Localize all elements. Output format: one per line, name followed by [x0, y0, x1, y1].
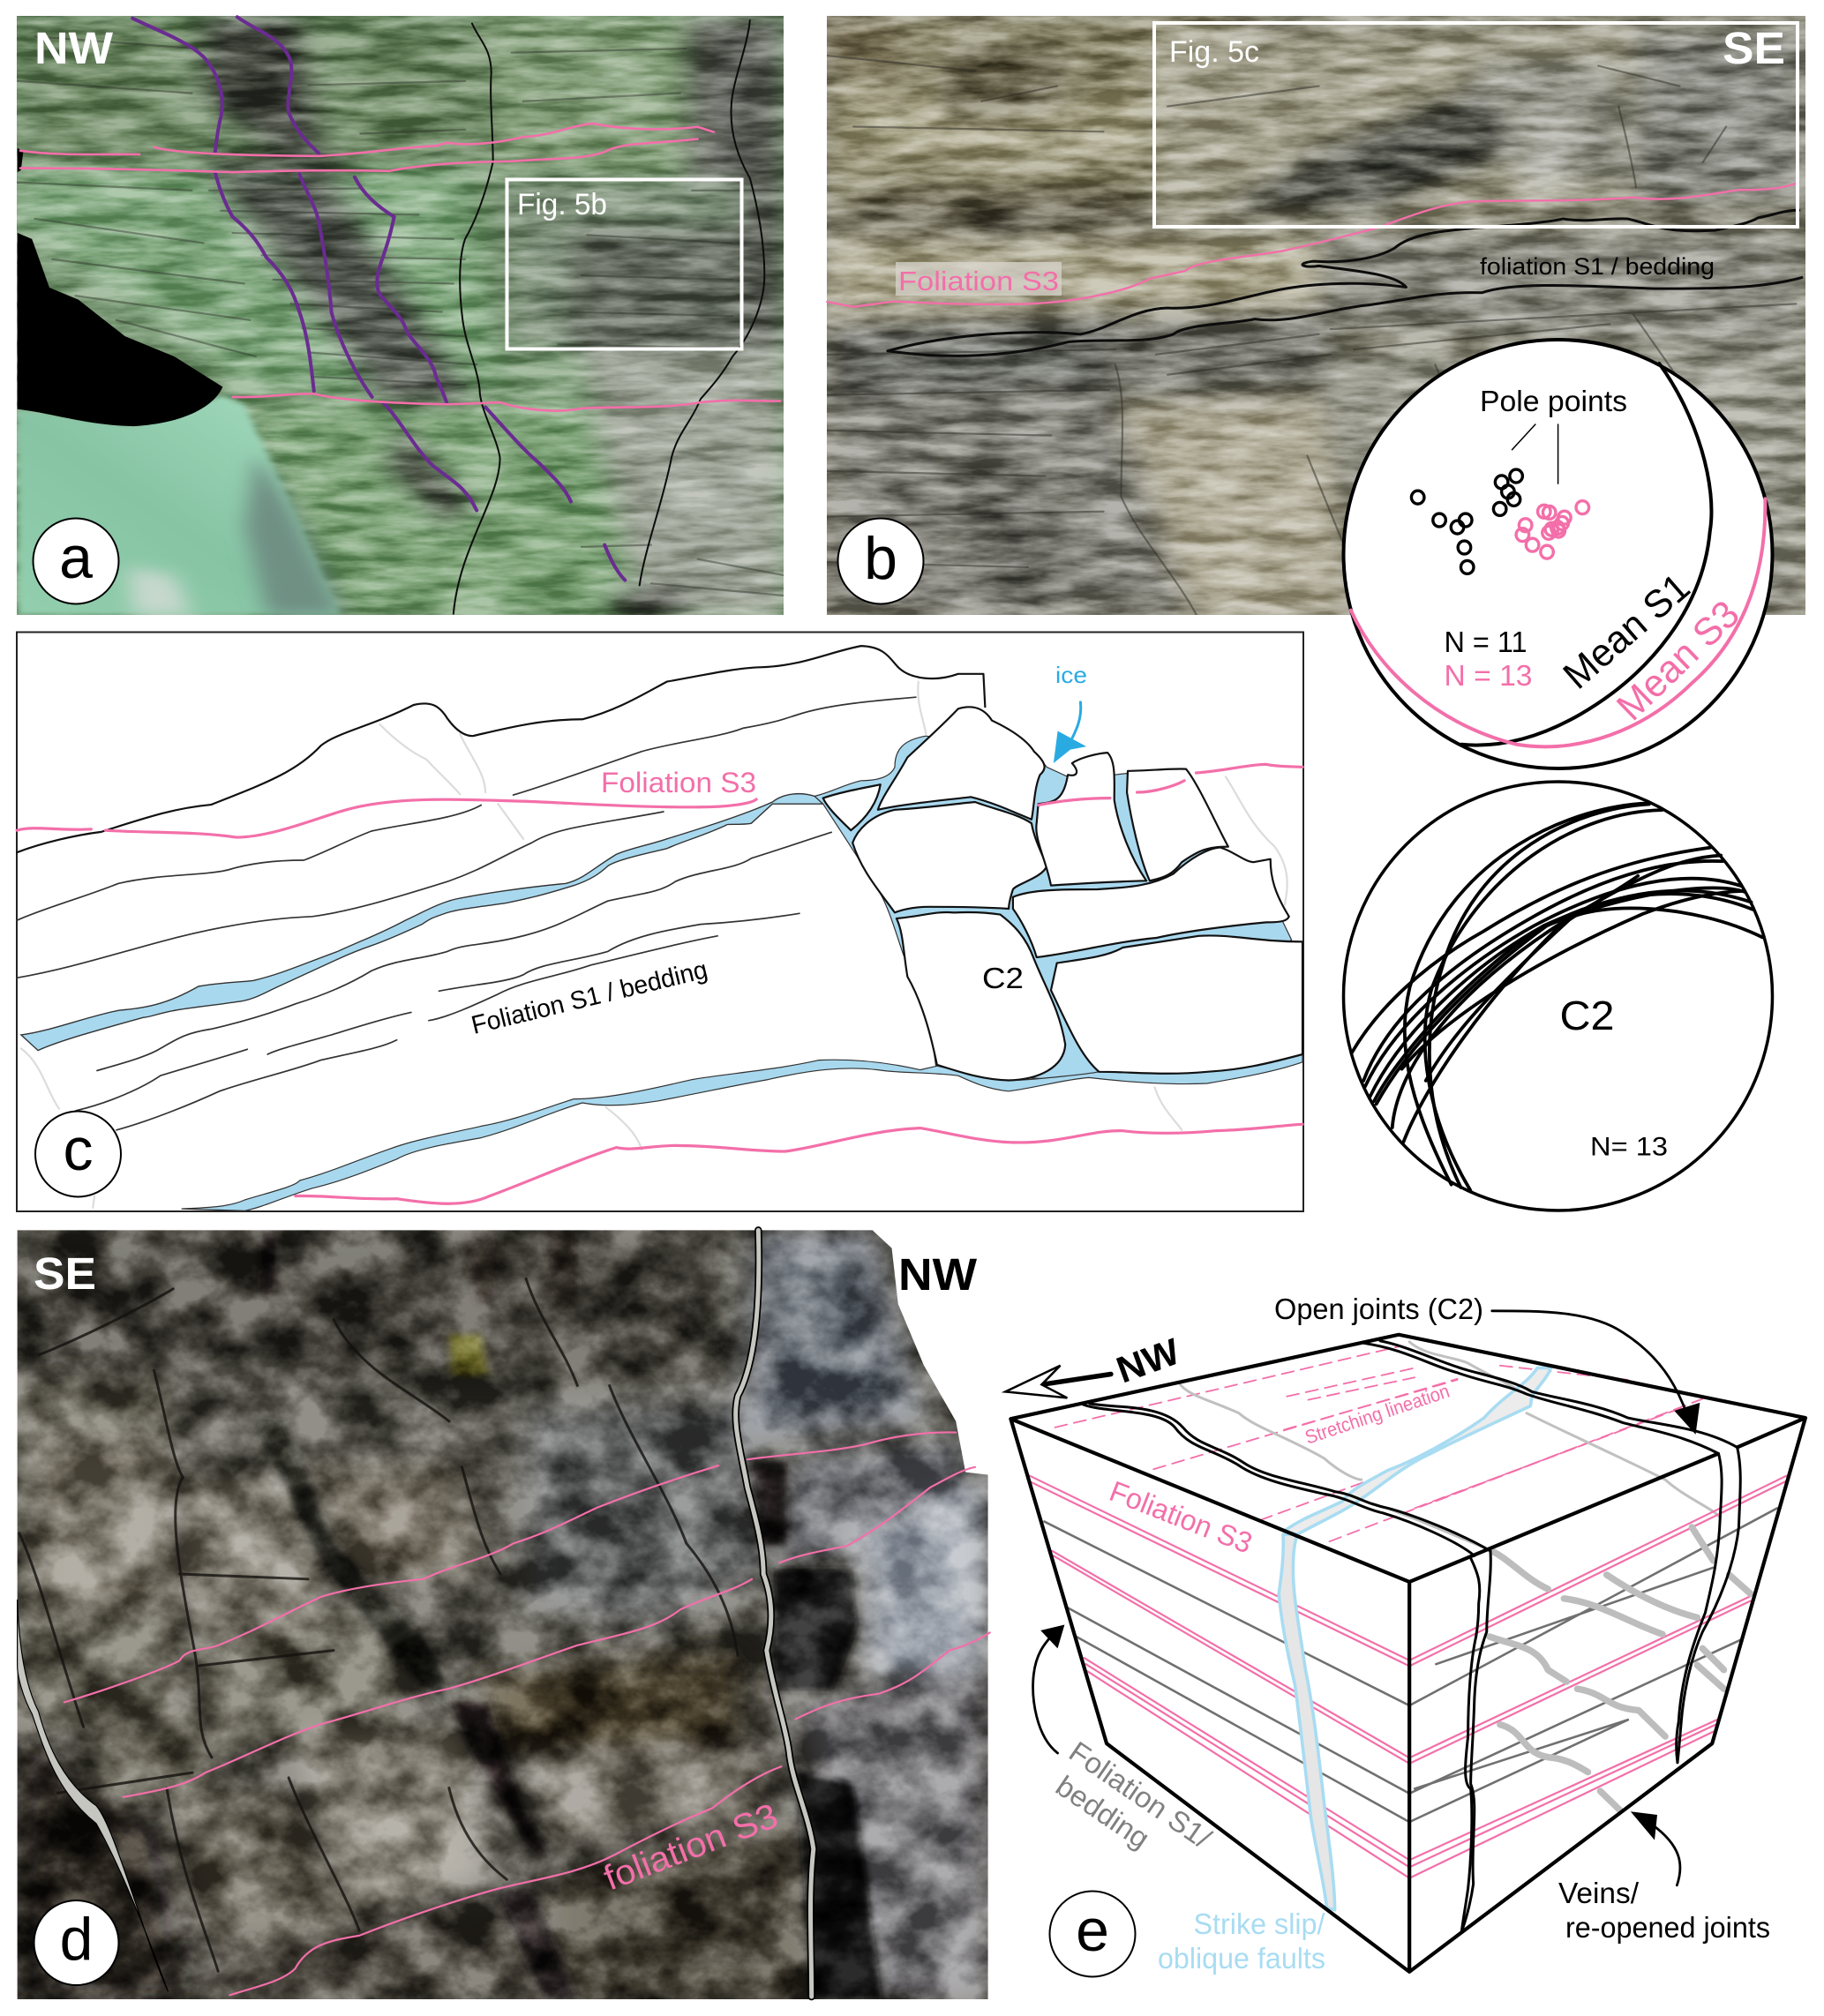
label Fig. 5b: Fig. 5b [517, 188, 607, 221]
label C2: C2 [982, 962, 1024, 994]
label Foliation S3: Foliation S3 [601, 767, 756, 798]
pole points S1 [1411, 469, 1522, 573]
label Stretching lineation: Stretching lineation [1302, 1380, 1452, 1449]
label Foliation S1 / bedding: Foliation S1 / bedding [469, 956, 710, 1040]
ice-filled upper fracture [21, 794, 823, 1051]
void: black model gap [18, 148, 222, 426]
leader lines [1512, 424, 1558, 483]
strike-slip fault on left face [1279, 1534, 1335, 1910]
direction NW: NW [898, 1249, 978, 1300]
pole points S3 [1516, 501, 1589, 558]
joints: black traces [454, 20, 764, 614]
panel letter a: a [59, 524, 93, 591]
foliation layers: grey lines [1044, 1508, 1777, 1822]
label Foliation S1/: Foliation S1/ [1063, 1735, 1218, 1855]
panel letter d [34, 1900, 118, 1985]
label re-opened joints: re-opened joints [1565, 1911, 1770, 1944]
label foliation S3: foliation S3 [598, 1796, 783, 1898]
label Foliation S3: Foliation S3 [1105, 1474, 1257, 1560]
panel letter b [838, 519, 923, 603]
foliation S1: black traces [888, 210, 1802, 356]
label NW: NW [1111, 1330, 1185, 1390]
inset box Fig. 5c [1154, 23, 1798, 227]
label Pole points: Pole points [1480, 385, 1627, 417]
arrow: ice [1054, 702, 1086, 763]
panel e: 3D block diagram [1005, 1293, 1805, 1976]
open joints C2 [1084, 1341, 1740, 1931]
stereonet: poles and mean planes S1, S3 [1343, 340, 1772, 768]
foliation S3: pink layered lines [1030, 1476, 1786, 1878]
label N= 13: N= 13 [1590, 1133, 1668, 1161]
open joint, right: grey infill with black edge [736, 1230, 814, 1997]
label Fig. 5c: Fig. 5c [1169, 35, 1259, 69]
strike-slip fault on top face [1284, 1368, 1550, 1534]
panel letter e: e [1076, 1897, 1109, 1964]
panel d: rock face photo [17, 1230, 990, 2000]
label foliation S1 / bedding: foliation S1 / bedding [1480, 253, 1715, 280]
foliation S3: pink traces [20, 124, 780, 410]
label Open joints (C2): Open joints (C2) [1274, 1293, 1483, 1325]
panel c: interpretive line drawing [17, 632, 1303, 1211]
panel letter b: b [864, 525, 897, 592]
ice web between blocks [814, 736, 1292, 1080]
label Mean S1: Mean S1 [1555, 566, 1698, 698]
minor joints: pale grey [21, 682, 1287, 1208]
panel letter a [34, 519, 118, 603]
veins on top face [1180, 1342, 1720, 1551]
great circles [1352, 804, 1762, 1190]
foliation S3: pink trace [827, 183, 1799, 307]
label Veins/: Veins/ [1558, 1877, 1640, 1909]
great circle mean S3 [1351, 498, 1765, 746]
foliation S3: pink traces [17, 764, 1302, 1203]
arrow: NW [1005, 1366, 1111, 1398]
great circle mean S1 [1461, 363, 1711, 746]
label Foliation S3 on pale box: Foliation S3 [898, 266, 1059, 296]
direction SE: SE [1723, 23, 1785, 73]
label N = 11: N = 11 [1444, 626, 1527, 658]
label bedding: bedding [1050, 1769, 1155, 1855]
label Strike slip/: Strike slip/ [1193, 1907, 1325, 1940]
top face stretching lineation dashes [1055, 1346, 1702, 1541]
ice-filled lower fracture [182, 1054, 1302, 1210]
block outline [1010, 1335, 1805, 1972]
strata shadows [18, 36, 784, 596]
arrow: foliation S1 [1033, 1624, 1064, 1753]
outcrop top outline [17, 646, 985, 852]
panel letter e [1050, 1892, 1135, 1976]
panel b: outcrop photo [827, 15, 1805, 615]
jointed blocks C2 [823, 707, 1302, 1080]
panel letter d: d [60, 1906, 93, 1973]
direction SE: SE [34, 1248, 96, 1299]
panel a: green-tinted outcrop model [17, 16, 784, 616]
arrow: open joints [1492, 1311, 1700, 1435]
mint debris slope [18, 395, 340, 615]
panel letter c: c [64, 1116, 94, 1183]
label Mean S3: Mean S3 [1609, 592, 1748, 729]
foliation S1 / bedding traces [17, 697, 916, 1130]
veins on right face [1490, 1527, 1751, 1810]
foliation S3: pink traces [64, 1432, 990, 1995]
rock cracks [19, 1278, 738, 1971]
open joint, left: grey infill [18, 1600, 168, 1991]
strata and cracks [827, 56, 1796, 615]
inset box Fig. 5b [507, 180, 741, 349]
stereonet: C2 joint great circles [1343, 782, 1772, 1210]
arrow: veins [1631, 1811, 1680, 1885]
direction NW: NW [34, 23, 114, 73]
panel letter c [35, 1112, 121, 1196]
label C2: C2 [1560, 993, 1615, 1038]
label N = 13: N = 13 [1444, 659, 1532, 692]
faults: purple traces [132, 17, 625, 581]
label oblique faults: oblique faults [1158, 1942, 1325, 1975]
label ice: ice [1055, 662, 1087, 688]
